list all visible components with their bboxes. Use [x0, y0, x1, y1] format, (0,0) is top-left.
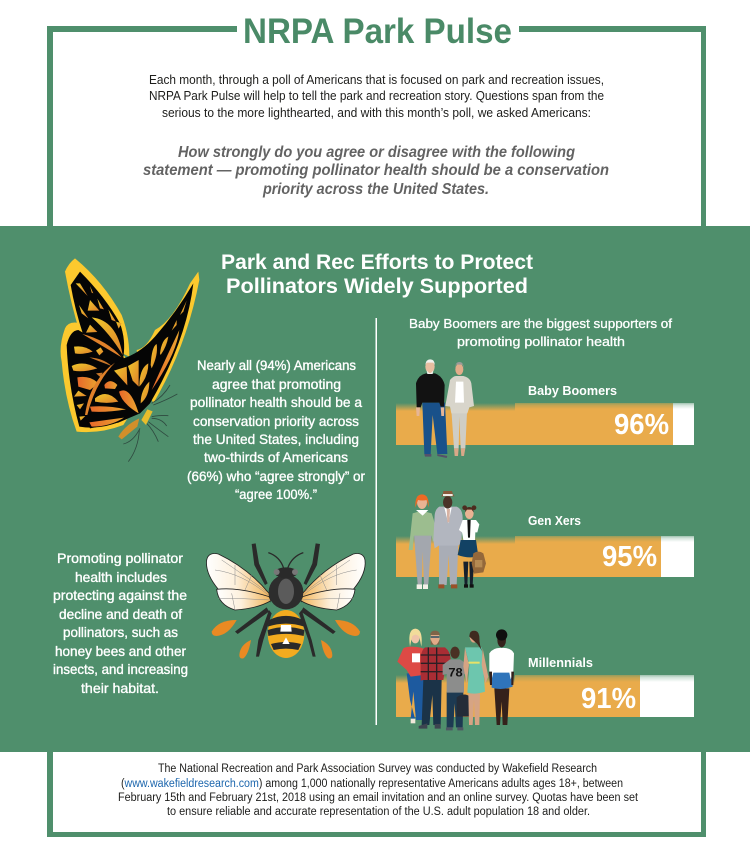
icon: monarch butterfly [61, 258, 199, 462]
text: what promoting pollinator health includes: honey bees and other [55, 643, 186, 659]
intro text: Each month, through a poll of Americans that is focused on park and recreation issues, [149, 73, 604, 87]
bee wing right [301, 553, 365, 610]
footer methodology note [118, 763, 639, 818]
icon: honey bee [206, 543, 365, 659]
bar chart: Baby Boomers 96% [396, 383, 694, 445]
people: Millennials [397, 629, 514, 730]
vertical divider [376, 318, 377, 725]
survey question: priority across the United States. [262, 181, 489, 198]
bar chart: Baby Boomers 96%: 96% [614, 409, 669, 441]
text: pollinator support statistic: conservation priority across [193, 413, 359, 429]
text: pollinator support statistic: “agree 100%.” [235, 486, 317, 502]
footer methodology note: to ensure reliable and accurate representation of the U.S. adult population 18 and older. [167, 806, 590, 818]
intro text: serious to the more lighthearted, and with this month’s poll, we asked Americans: [162, 106, 591, 120]
bar chart: Millennials 91%: 91% [581, 683, 636, 715]
text: pollinator support statistic: the United States, including [193, 431, 359, 447]
text: pollinator support statistic [187, 357, 365, 502]
text: pollinator support statistic: (66%) who “agree strongly” or [187, 468, 365, 484]
footer methodology note: February 15th and February 21st, 2018 using an email invitation and an online survey. Quotas have been set [118, 792, 639, 804]
text: pollinator support statistic: two-thirds of Americans [204, 449, 348, 465]
chart heading: promoting pollinator health [457, 334, 625, 349]
bar chart: Gen Xers 95%: 95% [602, 541, 657, 573]
panel heading: Park and Rec Efforts to Protect [221, 251, 533, 274]
footer methodology note: (www.wakefieldresearch.com) among 1,000 nationally representative Americans adults ages 18+, between [121, 778, 623, 790]
text: what promoting pollinator health includes: decline and death of [59, 606, 182, 622]
people: Baby Boomers [416, 359, 474, 458]
bar chart: Millennials 91%: Millennials [528, 655, 593, 670]
people: Gen Xers [409, 491, 486, 589]
chart heading [409, 316, 672, 349]
survey question: statement — promoting pollinator health should be a conservation [143, 162, 609, 179]
bee wing left [206, 553, 271, 610]
bar chart: Millennials 91% [396, 655, 694, 717]
text: what promoting pollinator health includes: pollinators, such as [63, 624, 178, 640]
text: pollinator support statistic: pollinator health should be a [190, 394, 362, 410]
chart heading: Baby Boomers are the biggest supporters of [409, 316, 672, 331]
survey question: How strongly do you agree or disagree with the following [178, 144, 575, 161]
text: what promoting pollinator health includes [53, 550, 188, 696]
panel heading [221, 251, 533, 298]
text: what promoting pollinator health includes: health includes [75, 569, 167, 585]
text: what promoting pollinator health includes: their habitat. [81, 680, 159, 696]
footer methodology note: The National Recreation and Park Association Survey was conducted by Wakefield Research [158, 763, 597, 775]
panel: green results band [0, 226, 750, 752]
bar chart: Gen Xers 95%: Gen Xers [528, 513, 581, 528]
text: pollinator support statistic: Nearly all (94%) Americans [197, 357, 356, 373]
text: what promoting pollinator health includes: insects, and increasing [53, 661, 188, 677]
panel heading: Pollinators Widely Supported [226, 275, 528, 298]
bar chart: Gen Xers 95% [396, 513, 694, 577]
text: what promoting pollinator health includes: protecting against the [53, 587, 187, 603]
text: pollinator support statistic: agree that promoting [212, 376, 341, 392]
intro text [149, 73, 604, 120]
title: NRPA Park Pulse [243, 12, 512, 51]
people: Millennials: 78 [448, 666, 463, 680]
intro text: NRPA Park Pulse will help to tell the park and recreation story. Questions span from the [149, 89, 604, 103]
text: what promoting pollinator health includes: Promoting pollinator [57, 550, 183, 566]
survey question [143, 144, 609, 198]
bar chart: Baby Boomers 96%: Baby Boomers [528, 383, 617, 398]
